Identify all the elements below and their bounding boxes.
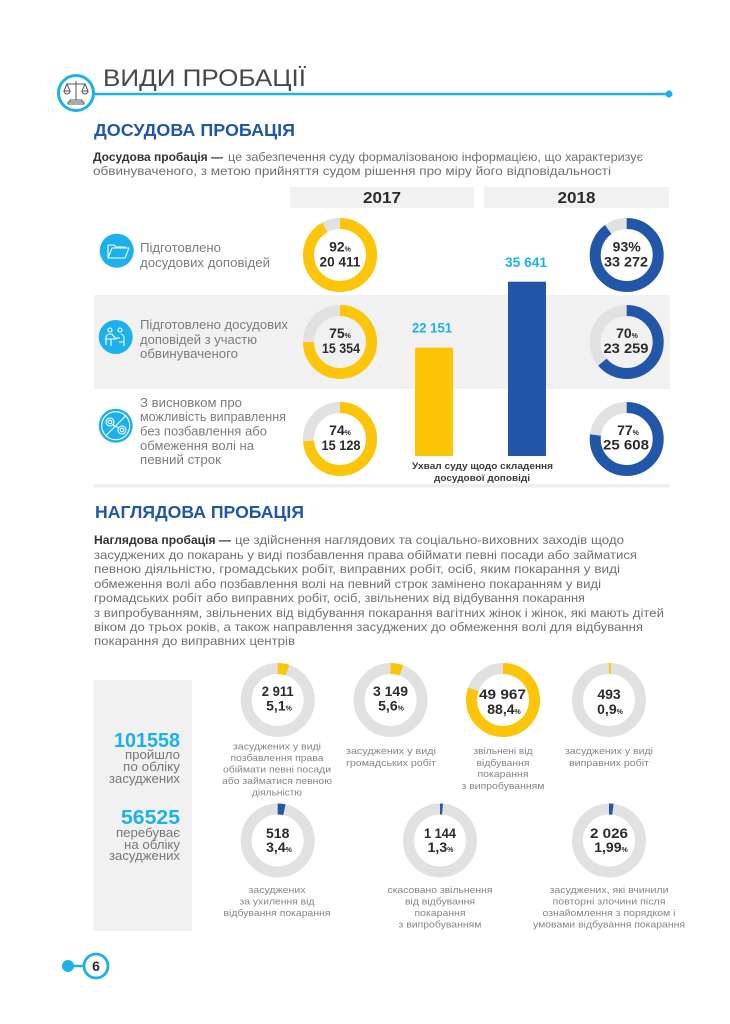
caption: deprivation of right: позбавлення права [230,753,324,764]
header line [92,90,672,98]
caption: deprivation of right: засуджених у виді [233,742,321,752]
stat: passed through register: засуджених [109,772,181,786]
bar chart: court rulings [412,254,553,484]
caption: released on probation: з випробуванням [462,781,544,792]
caption: released on probation: покарання [478,769,528,780]
caption: release cancelled: покарання [414,908,466,919]
donut: 2018 reports 93%: 33 272 [604,254,648,270]
stat: passed through register: 101558 [114,730,180,752]
donut: 2017 reports 92%: 92% [329,238,352,254]
row label: reports with participation: доповідей з участю [140,333,257,347]
row label: conclusion on correction: певний строк [140,453,222,467]
donut: release cancelled 1,3% [408,809,472,872]
donut: 2018 conclusion 77%: 25 608 [603,436,649,452]
text block: pre-trial definition: Досудова пробація — [93,150,223,164]
text block: supervisory definition [94,533,664,648]
row label: conclusion on correction [140,396,286,467]
page number [62,954,108,978]
caption: released on probation: звільнені від [474,746,533,757]
donut: released on probation 88,4%: 88,4% [487,701,522,717]
stat: passed through register: по обліку [123,760,181,774]
bar chart caption: Ухвал суду щодо складення [412,461,553,472]
text block: pre-trial definition [93,150,643,178]
donut: released on probation 88,4% [472,668,534,732]
icon: scales of justice [58,76,94,110]
donut: 2017 conclusion 74% [308,408,372,470]
row label: prepared reports: Підготовлено [140,241,221,255]
caption: repeat offences: ознайомлення з порядком і [542,908,676,919]
donut: community service 5,6%: 5,6% [378,698,405,714]
header: 2017 [290,187,474,208]
stat: currently registered: на обліку [124,838,181,852]
caption: release cancelled [388,885,492,930]
row label: reports with participation [140,318,289,361]
text block: supervisory definition: певною діяльністю, громадських робіт, виправних робіт, осіб, яким покарання у виді [94,562,620,576]
row label: prepared reports [140,241,270,270]
donut: release cancelled 1,3%: 1 144 [424,825,456,841]
donut: correctional labour 0,9%: 0,9% [597,701,624,717]
donut: repeat offences 1,99% [578,809,640,872]
header: 2017: 2017 [363,190,401,207]
donut: evasion 3,4% [246,809,309,872]
bar: 2017 [412,320,453,456]
row label: conclusion on correction: обмеження волі на [140,439,254,453]
row label: prepared reports: досудових доповідей [140,256,270,270]
caption: deprivation of right: обіймати певні посади [223,764,331,776]
panel: pre-trial table [62,187,685,978]
bar: 2017: 22 151 [412,320,452,336]
donut: release cancelled 1,3%: 1,3% [428,839,454,855]
donut: 2017 reports 92% [308,224,372,286]
header: 2018 [484,187,669,208]
donut: 2018 participation 70%: 70% [616,325,639,341]
page number: 6 [92,958,100,974]
caption: evasion: за ухилення від [240,896,315,908]
donut: 2018 participation 70%: 23 259 [604,340,649,356]
caption: deprivation of right: діяльністю [252,788,302,798]
caption: deprivation of right [222,742,332,798]
caption: evasion [224,885,330,919]
stat: passed through register: пройшло [125,748,180,762]
donut: 2017 reports 92%: 20 411 [320,254,361,270]
caption: evasion: засуджених [248,885,306,896]
heading: supervisory probation: НАГЛЯДОВА ПРОБАЦІЯ [95,502,304,522]
donut: 2017 participation 75%: 15 354 [322,340,360,356]
text block: supervisory definition: засуджених до покарань у виді позбавлення права обіймати певні посади або займатися [94,548,637,562]
text block: pre-trial definition: це забезпечення суду формалізованою інформацією, що характеризує [228,150,643,164]
text block: supervisory definition: з випробуванням, звільнених від відбування покарання вагітних жінок і жінок, які мають дітей [94,606,664,620]
donut: deprivation of right 5,1% [246,668,309,732]
text block: supervisory definition: обмеження волі або позбавлення волі на певний строк замінено покаранням у виді [94,577,601,591]
row label: conclusion on correction: З висновком про [140,396,242,410]
donut: evasion 3,4%: 3,4% [266,839,293,855]
text block: supervisory definition: віком до трьох років, а також направлення засуджених до обмеження волі для відбування [94,620,643,634]
donut: 2017 conclusion 74%: 74% [329,422,352,438]
stat: currently registered: перебуває [116,826,181,840]
stat: passed through register [109,730,181,786]
caption: deprivation of right: або займатися певною [222,776,332,787]
donut: 2018 conclusion 77% [595,408,658,470]
caption: released on probation: відбування [476,758,530,769]
icon: crossed handcuffs [99,409,133,443]
donut: 2018 reports 93% [595,224,658,286]
donut: repeat offences 1,99%: 1,99% [594,839,629,855]
icon: folder [100,234,134,268]
caption: release cancelled: скасовано звільнення [388,885,492,896]
stat: currently registered [109,807,181,863]
bar chart caption [412,461,553,484]
donut: community service 5,6% [359,668,422,732]
icon: people at a table [99,320,133,354]
title: ВИДИ ПРОБАЦІЇ [103,65,306,92]
stat: currently registered: засуджених [109,849,181,863]
row label: reports with participation: обвинуваченого [140,347,238,361]
caption: correctional labour: виправних робіт [569,758,650,769]
caption: community service: засуджених у виді [346,746,436,757]
row label: conclusion on correction: без позбавлення або [140,424,267,438]
panel: totals [94,680,192,931]
caption: evasion: відбування покарання [224,908,330,919]
donut: deprivation of right 5,1%: 2 911 [262,683,294,699]
donut: 2017 participation 75% [308,310,372,374]
donut: 2017 participation 75%: 75% [329,325,352,341]
donut: released on probation 88,4%: 49 967 [479,686,526,702]
text block: supervisory definition: покарання до виправних центрів [94,634,295,648]
caption: repeat offences [533,885,685,930]
donut: 2018 conclusion 77%: 77% [617,422,640,438]
row label: reports with participation: Підготовлено досудових [140,318,289,332]
caption: repeat offences: засуджених, які вчинили [550,885,668,896]
bar: 2018 [505,254,547,456]
donut: correctional labour 0,9%: 493 [597,686,621,702]
text block: supervisory definition: громадських робіт або виправних робіт, осіб, звільнених від відбування покарання [94,591,585,605]
caption: correctional labour: засуджених у виді [565,746,653,757]
caption: community service [346,746,437,769]
donut: evasion 3,4%: 518 [266,825,290,841]
caption: repeat offences: повторні злочини після [552,896,666,908]
caption: release cancelled: від відбування [405,896,475,908]
donut: 2018 reports 93%: 93% [613,238,641,254]
caption: release cancelled: з випробуванням [398,920,482,930]
header: 2018: 2018 [558,190,596,207]
caption: correctional labour [565,746,653,769]
text block: supervisory definition: Наглядова пробація — [94,533,231,547]
donut: repeat offences 1,99%: 2 026 [590,825,628,841]
text block: pre-trial definition: обвинуваченого, з метою прийняття судом рішення про міру його відповідальності [93,164,611,178]
donut: 2018 participation 70% [595,310,658,374]
heading: pre-trial probation: ДОСУДОВА ПРОБАЦІЯ [94,120,295,140]
donut: community service 5,6%: 3 149 [373,683,408,699]
donut: 2017 conclusion 74%: 15 128 [322,437,361,453]
caption: repeat offences: умовами відбування покарання [533,920,685,930]
caption: released on probation [462,746,544,792]
stat: currently registered: 56525 [121,807,180,829]
donut: correctional labour 0,9% [578,668,640,732]
row label: conclusion on correction: можливість виправлення [140,410,286,424]
caption: community service: громадських робіт [346,758,437,769]
text block: supervisory definition: це здійснення наглядових та соціально-виховних заходів щодо [235,533,624,547]
donut: deprivation of right 5,1%: 5,1% [266,698,293,714]
bar: 2018: 35 641 [505,254,547,270]
bar chart caption: досудової доповіді [434,473,530,484]
